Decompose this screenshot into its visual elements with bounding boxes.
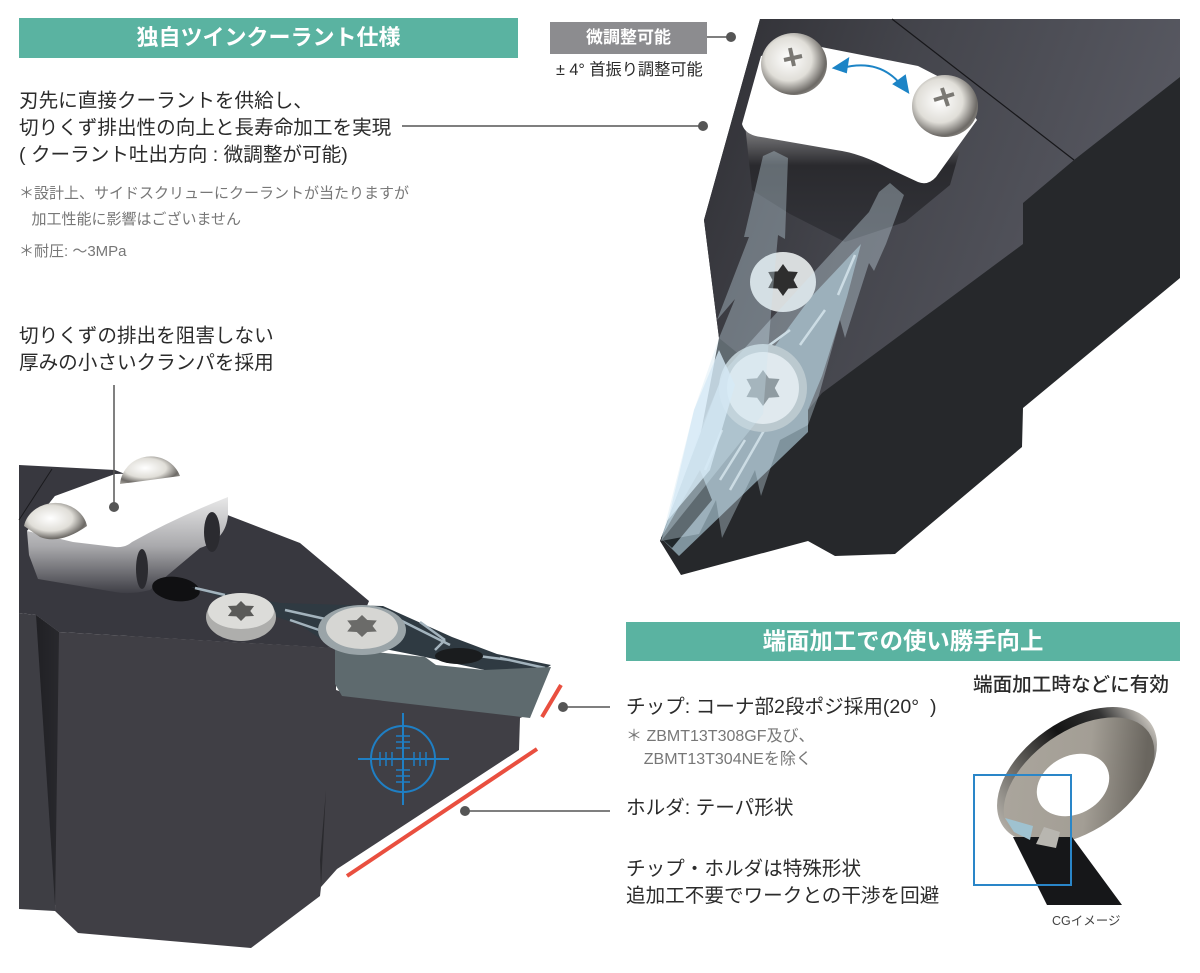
illustration: workpiece ring with holder [972,679,1182,905]
clamp slots [136,549,148,589]
text: chip: チップ: コーナ部2段ポジ採用(20° ) [626,696,936,718]
holder top surface [704,19,1180,410]
blue frame [974,775,1071,885]
clamp side [27,489,228,593]
insert flank [335,648,551,718]
screw A [206,593,276,641]
label text: adjustment angle: ± 4° 首振り調整可能 [556,61,703,79]
heading: twin coolant [19,18,518,58]
leader: holder [460,806,610,816]
insert pattern [195,588,545,668]
insert detail marks [705,255,855,490]
top surface [19,465,369,660]
holder seam [892,19,1074,160]
clamp top [27,472,228,547]
text block: coolant description: 刃先に直接クーラントを供給し、 切りくず排出性の向上と長寿命加工を実現 ( クーラント吐出方向 : 微調整が可能) [19,90,391,166]
insert tip [661,470,712,548]
leader: clamp [109,385,119,512]
dark strip [36,615,75,905]
heading: facing [626,622,1180,661]
insert main screw [719,344,807,432]
coolant jet left [661,151,788,541]
text: special shape: チップ・ホルダは特殊形状 追加工不要でワークとの干渉を回避 [626,858,939,907]
red line insert [542,685,561,717]
leader: coolant [402,121,708,131]
hole [151,574,201,604]
leader: fine adjustment [707,32,736,42]
text: holder: ホルダ: テーパ形状 [626,797,793,819]
screw right [912,75,978,137]
coolant jet right [661,183,904,541]
front face [55,632,530,948]
dome screw front [24,503,87,539]
leader: chip [558,702,610,712]
ring back [972,679,1182,871]
clamp [742,45,977,183]
coolant spray pale [668,350,735,520]
insert top [191,587,551,680]
heading: twin coolant: 独自ツインクーラント仕様 [136,25,400,50]
crosshair mark [358,713,449,805]
small insert [1005,818,1033,840]
insert clamp screw [750,252,816,312]
text block: clamp: 切りくずの排出を阻害しない 厚みの小さいクランパを採用 [19,325,274,374]
screw B [318,605,406,655]
illustration: holder close-up with coolant jets [660,19,1180,575]
caption: CGイメージ [1052,914,1121,928]
seam [19,469,52,520]
screw left [761,33,827,95]
front fold [320,790,326,887]
ring hole [1026,742,1120,828]
holder body front [660,19,1180,575]
clamp shadow [745,124,960,242]
dome screws [120,456,180,484]
label: fine adjustment: 微調整可能 [586,28,671,47]
note: pressure: ＊耐圧: ～3MPa [19,243,127,260]
insert [661,244,861,556]
label: fine adjustment [550,22,707,54]
illustration: holder side view [19,456,561,948]
insert hollow [435,648,483,664]
left side face [19,613,59,911]
heading: effective: 端面加工時などに有効 [973,674,1169,696]
red line holder [347,749,537,876]
note: chip exclusions: ＊ ZBMT13T308GF及び、 ZBMT13T304NEを除く [626,728,814,768]
ring face [981,691,1177,871]
clamp slot right [204,512,220,552]
blue adjustment arrow [834,59,908,92]
note: side screw: ＊設計上、サイドスクリューにクーラントが当たりますが 加工性能に影響はございません [19,185,409,228]
small clamp [1036,827,1060,848]
holder bar [1013,837,1122,905]
screw cross marks [784,48,954,106]
heading: facing: 端面加工での使い勝手向上 [763,628,1043,654]
